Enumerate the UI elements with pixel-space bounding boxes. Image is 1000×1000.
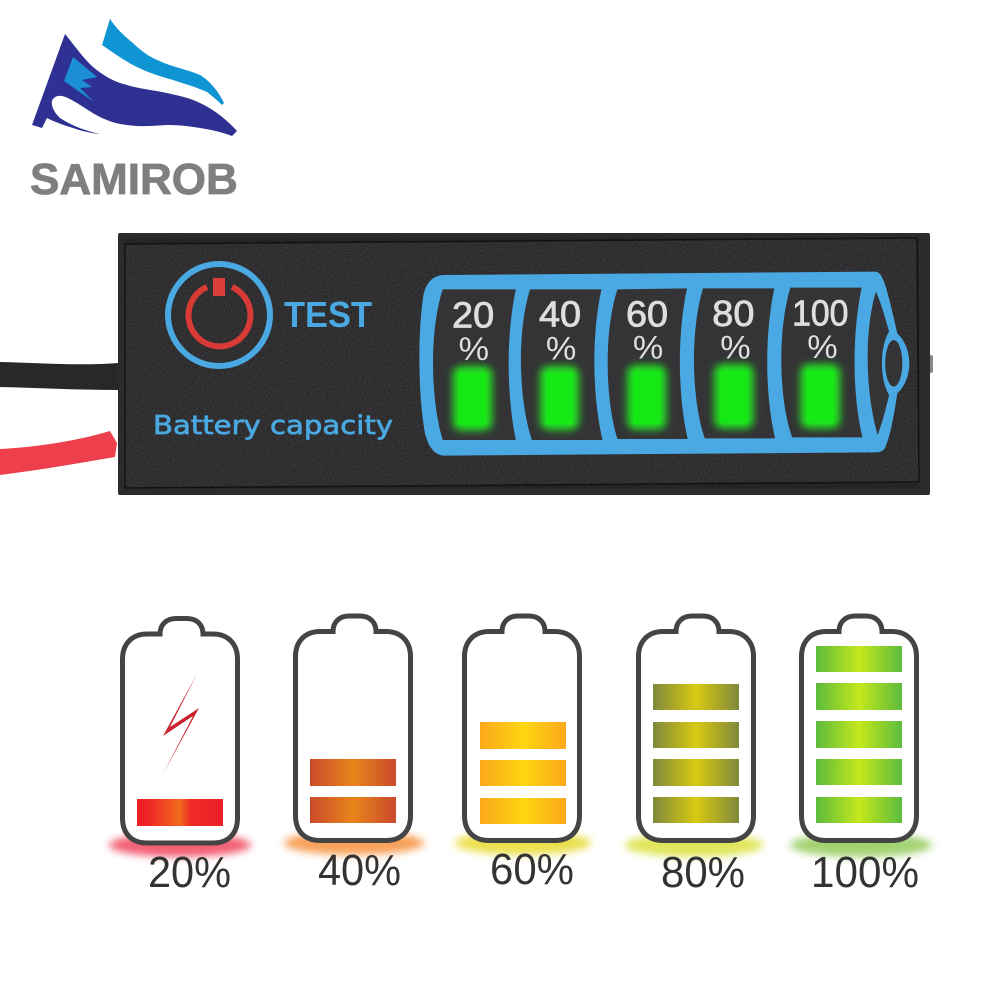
label 20 percent: %	[459, 332, 489, 368]
device body	[118, 233, 930, 495]
LED 60	[633, 372, 660, 424]
battery icon: 20%	[109, 618, 251, 897]
level bars	[310, 759, 396, 823]
battery icon: 40%	[284, 616, 424, 895]
gauge cell 2	[521, 289, 602, 440]
label 100: 100	[792, 292, 848, 333]
label 80: 80	[712, 293, 754, 334]
gauge cell 4	[694, 288, 775, 438]
power outer ring	[168, 264, 270, 366]
gauge end cap	[868, 292, 889, 435]
outline	[638, 616, 754, 840]
level bar	[137, 799, 223, 826]
device panel	[118, 233, 930, 495]
LED 20	[459, 373, 486, 425]
floor glow	[109, 833, 251, 857]
label 40 percent: %	[546, 331, 576, 367]
outline	[802, 616, 916, 840]
Battery capacity label: Battery capacity	[153, 411, 393, 441]
gauge cell 1	[433, 289, 516, 440]
battery icon: 100%	[790, 616, 932, 897]
label 60: 60	[626, 294, 668, 334]
label 100 percent: %	[807, 330, 838, 366]
label 40: 40	[539, 294, 581, 334]
logo: SAMIROB	[30, 19, 238, 204]
icon: power button	[168, 264, 270, 366]
level bars	[480, 722, 566, 824]
logo wordmark: SAMIROB	[30, 155, 238, 204]
logo icon: dark blue flag	[32, 34, 237, 136]
floor glow	[455, 831, 591, 855]
battery gauge printed on device	[419, 272, 909, 456]
logo icon: light blue wave	[102, 19, 224, 105]
floor glow	[790, 833, 932, 857]
red wire	[0, 431, 117, 475]
LED glows	[453, 364, 840, 431]
outline	[122, 618, 238, 843]
lightning bolt	[163, 674, 199, 774]
level bars	[816, 646, 902, 823]
gauge cell 5	[781, 288, 862, 437]
floor glow	[625, 833, 763, 857]
power stem	[213, 278, 225, 296]
small side button	[928, 355, 933, 373]
LED 100	[806, 371, 834, 423]
percent label: 20%	[148, 848, 231, 897]
outline	[296, 616, 410, 840]
label 80 percent: %	[720, 331, 751, 366]
power arc	[188, 287, 250, 346]
device face	[125, 238, 919, 488]
floor glow	[284, 831, 424, 855]
LED 80	[720, 371, 748, 423]
percent label: 60%	[490, 845, 574, 894]
battery icon: 60%	[455, 616, 591, 894]
gauge labels	[452, 292, 848, 368]
gauge blue outline	[419, 272, 909, 456]
percent label: 40%	[318, 846, 401, 895]
black wire	[0, 362, 118, 390]
percent label: 100%	[811, 848, 919, 897]
battery icon: 80%	[625, 616, 763, 897]
logo icon: flag notch	[64, 57, 97, 102]
level bars	[653, 684, 739, 823]
percent label: 80%	[661, 848, 745, 897]
label 60 percent: %	[633, 331, 663, 366]
TEST label: TEST	[284, 294, 372, 335]
gauge cell 3	[608, 288, 688, 439]
outline	[464, 616, 580, 840]
LED 40	[546, 373, 573, 424]
gauge terminal	[885, 340, 902, 387]
label 20: 20	[452, 294, 494, 335]
